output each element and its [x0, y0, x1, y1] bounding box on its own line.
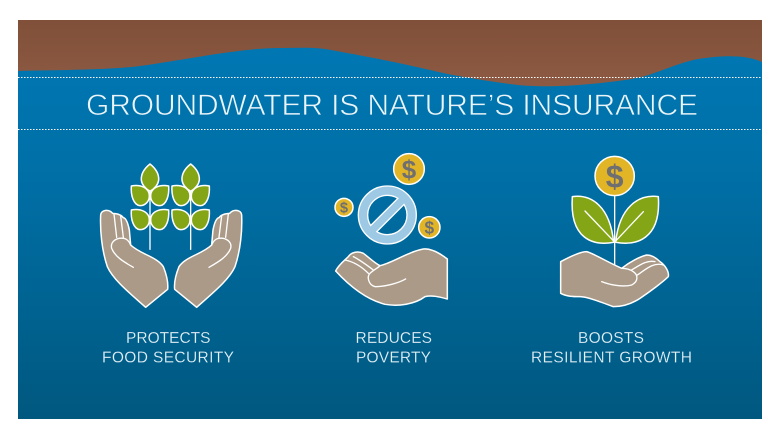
- icon: small left coin: $: [340, 201, 348, 217]
- icon: small right coin: $: [425, 218, 435, 238]
- icon: right wheat: [172, 164, 209, 249]
- icon: open hand: [336, 249, 447, 305]
- icon: large coin: $: [402, 154, 417, 184]
- label: boosts resilient growth: BOOSTS: [578, 330, 644, 347]
- icon: small left coin: [335, 198, 353, 217]
- dotted line: top: [18, 76, 762, 78]
- icon: coin flower: [595, 156, 634, 196]
- icon: right leaf: [616, 196, 659, 243]
- icon: small right coin: [419, 217, 440, 238]
- icon: left wheat: [131, 164, 169, 249]
- label: reduces poverty: REDUCES: [356, 330, 432, 347]
- title: GROUNDWATER IS NATURE’S INSURANCE: [86, 89, 698, 122]
- icon: hand with coins and prohibition sign: [335, 154, 447, 305]
- icon: hand with coin plant: [561, 156, 668, 307]
- icon: right hand: [175, 210, 242, 307]
- icon: plant stem: [613, 195, 617, 269]
- label: reduces poverty: [356, 330, 432, 366]
- dotted line: bottom: [18, 128, 762, 130]
- label: protects food security: FOOD SECURITY: [102, 350, 234, 366]
- label: protects food security: PROTECTS: [126, 330, 210, 347]
- icon: left leaf: [572, 196, 614, 243]
- icon: hands with wheat: [101, 164, 242, 307]
- label: reduces poverty: POVERTY: [356, 350, 431, 366]
- icon: coin flower: $: [606, 159, 624, 195]
- icon: left hand: [101, 210, 168, 307]
- icon: prohibition sign: [363, 191, 412, 239]
- label: boosts resilient growth: [531, 330, 692, 366]
- label: boosts resilient growth: RESILIENT GROWTH: [531, 350, 692, 366]
- panel: soil layer: [18, 20, 762, 90]
- icon: open hand: [561, 252, 668, 307]
- label: protects food security: [102, 330, 234, 366]
- icon: large coin: [394, 154, 424, 184]
